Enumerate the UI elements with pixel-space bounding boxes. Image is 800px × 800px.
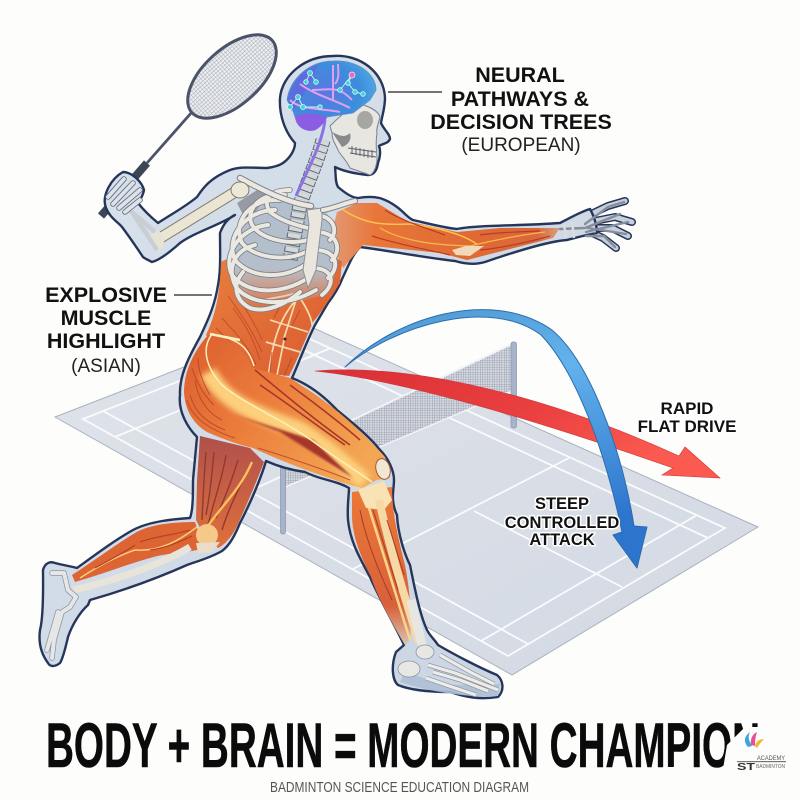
subtitle: BADMINTON SCIENCE EDUCATION DIAGRAM: [270, 779, 529, 796]
label: explosive muscle highlight: HIGHLIGHT: [47, 329, 165, 353]
collarbones: [240, 178, 311, 206]
front foot: [398, 645, 500, 696]
scapula: [237, 190, 272, 223]
label: steep controlled attack: CONTROLLED: [505, 514, 619, 532]
muscle: leading arm: [330, 203, 560, 268]
label: neural pathways and decision trees: (EUROPEAN): [461, 135, 581, 156]
arrow: rapid flat drive: [315, 370, 720, 478]
logo: ST badminton academy: ACADEMY: [757, 756, 785, 762]
label: explosive muscle highlight: [45, 283, 167, 377]
skeleton: leg bones: [73, 457, 422, 645]
cheek and jaw shade: [332, 132, 351, 147]
label: neural pathways and decision trees: [430, 63, 612, 156]
logo: ST badminton academy: ST: [737, 762, 755, 773]
body silhouette: [39, 56, 597, 698]
label: steep controlled attack: [505, 495, 619, 549]
label line: brain: [388, 91, 442, 93]
muscle: rear leg: [72, 436, 264, 582]
arrow: steep controlled attack: [345, 310, 647, 568]
spine: [290, 140, 323, 260]
label: rapid flat drive: FLAT DRIVE: [638, 417, 736, 436]
racket: [101, 20, 291, 216]
sternum: [303, 208, 322, 288]
label: steep controlled attack: ATTACK: [529, 531, 595, 549]
spinal cord: [296, 120, 325, 196]
hand gripping handle: [108, 179, 140, 212]
label: steep controlled attack: STEEP: [535, 495, 589, 513]
brain with neural pathways: [287, 61, 376, 131]
muscle: rear calf: [72, 522, 204, 582]
label: explosive muscle highlight: (ASIAN): [71, 356, 141, 377]
net: [280, 342, 516, 534]
label: neural pathways and decision trees: DECISION TREES: [430, 110, 612, 134]
knee cap: [374, 457, 392, 481]
label line: muscle: [174, 294, 212, 296]
skeleton: racket arm: [108, 179, 249, 251]
ribcage: [229, 140, 355, 310]
label: rapid flat drive: RAPID: [661, 399, 713, 418]
muscle: torso and abdominals: [206, 249, 342, 378]
skull: [330, 103, 380, 175]
muscle: front thigh and glute: [184, 334, 390, 488]
teeth: [348, 146, 376, 158]
rib background: [232, 193, 338, 308]
label: explosive muscle highlight: MUSCLE: [61, 306, 151, 330]
badminton court: [55, 322, 758, 675]
eye socket: [357, 111, 373, 129]
logo: ST badminton academy: BADMINTON: [756, 764, 785, 770]
rear knee: [196, 524, 218, 546]
skeleton: leading hand: [560, 202, 628, 247]
logo: ST badminton academy: [722, 727, 800, 775]
net post: left: [280, 455, 286, 534]
muscle: shin: [352, 487, 411, 645]
fingers: leading hand: [585, 201, 632, 248]
rear foot: [47, 573, 76, 658]
net post: right: [511, 342, 516, 428]
label: neural pathways and decision trees: PATHWAYS &: [451, 87, 589, 111]
label: rapid flat drive: [638, 399, 736, 436]
elbow bone: [452, 246, 484, 256]
label: explosive muscle highlight: EXPLOSIVE: [45, 283, 167, 307]
label: neural pathways and decision trees: NEURAL: [475, 63, 565, 87]
